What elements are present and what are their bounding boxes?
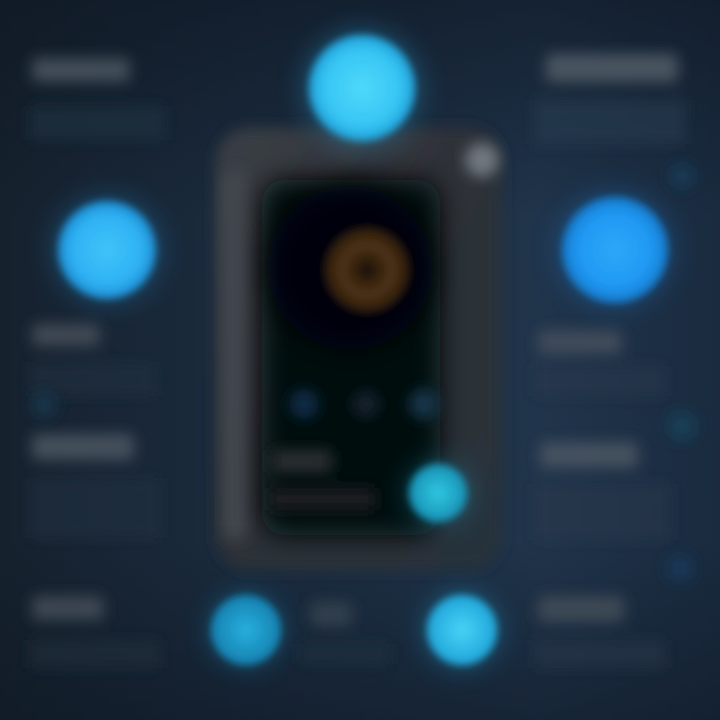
bottom center text <box>300 602 390 664</box>
icon: bottom right circle <box>422 590 502 670</box>
icon: small dim dots <box>31 164 696 581</box>
icon: right circle <box>557 192 673 308</box>
screen dots <box>289 389 439 419</box>
icon: left circle <box>53 196 161 304</box>
device left edge highlight <box>222 170 248 540</box>
device screen <box>262 180 440 535</box>
icon: top circle <box>304 30 420 146</box>
camera housing <box>268 186 432 350</box>
icon: bottom left circle <box>206 590 286 670</box>
camera lens <box>322 225 412 315</box>
panel: right column text placeholders <box>535 54 685 668</box>
icon: teal screen circle <box>404 459 472 527</box>
device corner highlight <box>465 143 499 177</box>
screen text <box>270 450 375 510</box>
device body <box>216 128 502 570</box>
panel: left column text placeholders <box>30 58 165 668</box>
device <box>216 128 502 570</box>
